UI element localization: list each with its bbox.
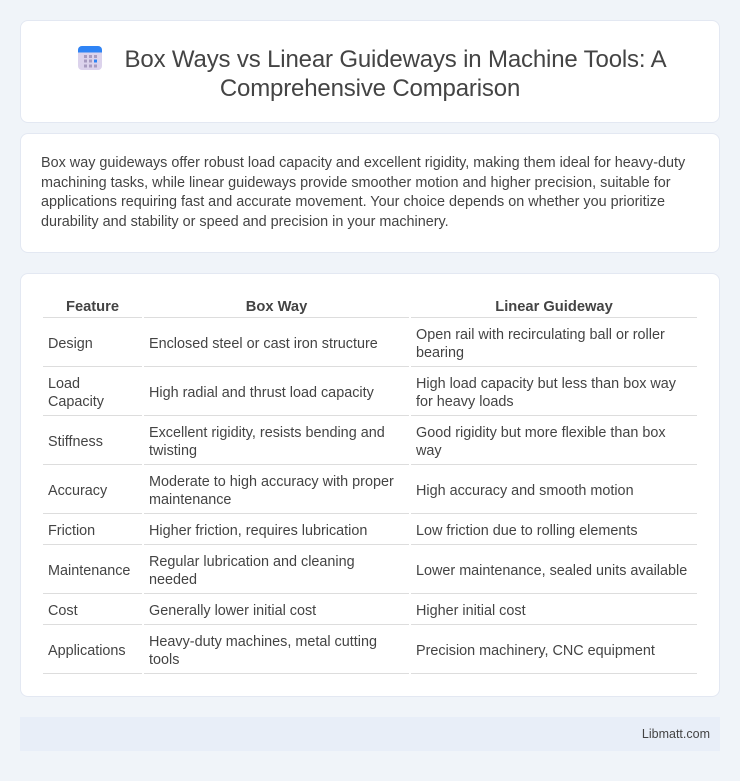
comparison table: bearing (416, 344, 464, 360)
comparison table: needed (149, 572, 197, 588)
comparison table: Generally lower initial cost (149, 602, 316, 618)
text block: introduction (41, 155, 686, 230)
comparison table: maintenance (149, 492, 231, 508)
comparison table: Higher initial cost (416, 602, 526, 618)
comparison table: tools (149, 652, 179, 668)
comparison table: Friction (48, 522, 95, 538)
comparison table: Design (48, 336, 93, 352)
comparison table: Linear Guideway (495, 299, 613, 315)
icon: calendar (78, 46, 102, 70)
panel: intro card (20, 133, 720, 253)
comparison table: Load (48, 376, 80, 392)
comparison table: Box Way (246, 299, 307, 315)
comparison table: for heavy loads (416, 394, 514, 410)
comparison table: Feature (66, 299, 119, 315)
comparison table: Stiffness (48, 434, 103, 450)
text block: introduction: durability and stability or speed and precision in your machinery. (41, 214, 449, 230)
comparison table: Regular lubrication and cleaning (149, 554, 355, 570)
comparison table: Accuracy (48, 482, 107, 498)
comparison table: Lower maintenance, sealed units available (416, 562, 687, 578)
title (125, 46, 666, 102)
comparison table: way (416, 442, 442, 458)
text block: introduction: Box way guideways offer robust load capacity and excellent rigidity, making them ideal for heavy-duty (41, 155, 685, 171)
comparison table: High radial and thrust load capacity (149, 384, 374, 400)
comparison table: Good rigidity but more flexible than box (416, 424, 666, 440)
comparison table: High accuracy and smooth motion (416, 482, 634, 498)
comparison table: Cost (48, 602, 78, 618)
text block: introduction: machining tasks, while linear guideways provide smoother motion and higher precision, suitable for (41, 175, 671, 191)
footer bar (20, 717, 720, 751)
comparison table: Low friction due to rolling elements (416, 522, 638, 538)
comparison table (43, 299, 697, 674)
comparison table: Higher friction, requires lubrication (149, 522, 367, 538)
footer bar: Libmatt.com (642, 727, 710, 741)
comparison table: Moderate to high accuracy with proper (149, 474, 394, 490)
comparison table: Applications (48, 642, 126, 658)
panel: table card (20, 273, 720, 697)
panel: title card (20, 20, 720, 123)
comparison table: Maintenance (48, 562, 130, 578)
title: Comprehensive Comparison (220, 75, 520, 102)
comparison table: Precision machinery, CNC equipment (416, 642, 655, 658)
comparison table: Open rail with recirculating ball or roller (416, 326, 665, 342)
comparison table: Heavy-duty machines, metal cutting (149, 634, 377, 650)
comparison table: High load capacity but less than box way (416, 376, 676, 392)
text block: introduction: applications requiring fast and accurate movement. Your choice depends on whether you prioritize (41, 194, 665, 210)
comparison table: Capacity (48, 394, 104, 410)
title: Box Ways vs Linear Guideways in Machine Tools: A (125, 46, 666, 73)
comparison table: twisting (149, 442, 197, 458)
comparison table: Enclosed steel or cast iron structure (149, 336, 378, 352)
comparison table: Excellent rigidity, resists bending and (149, 424, 385, 440)
